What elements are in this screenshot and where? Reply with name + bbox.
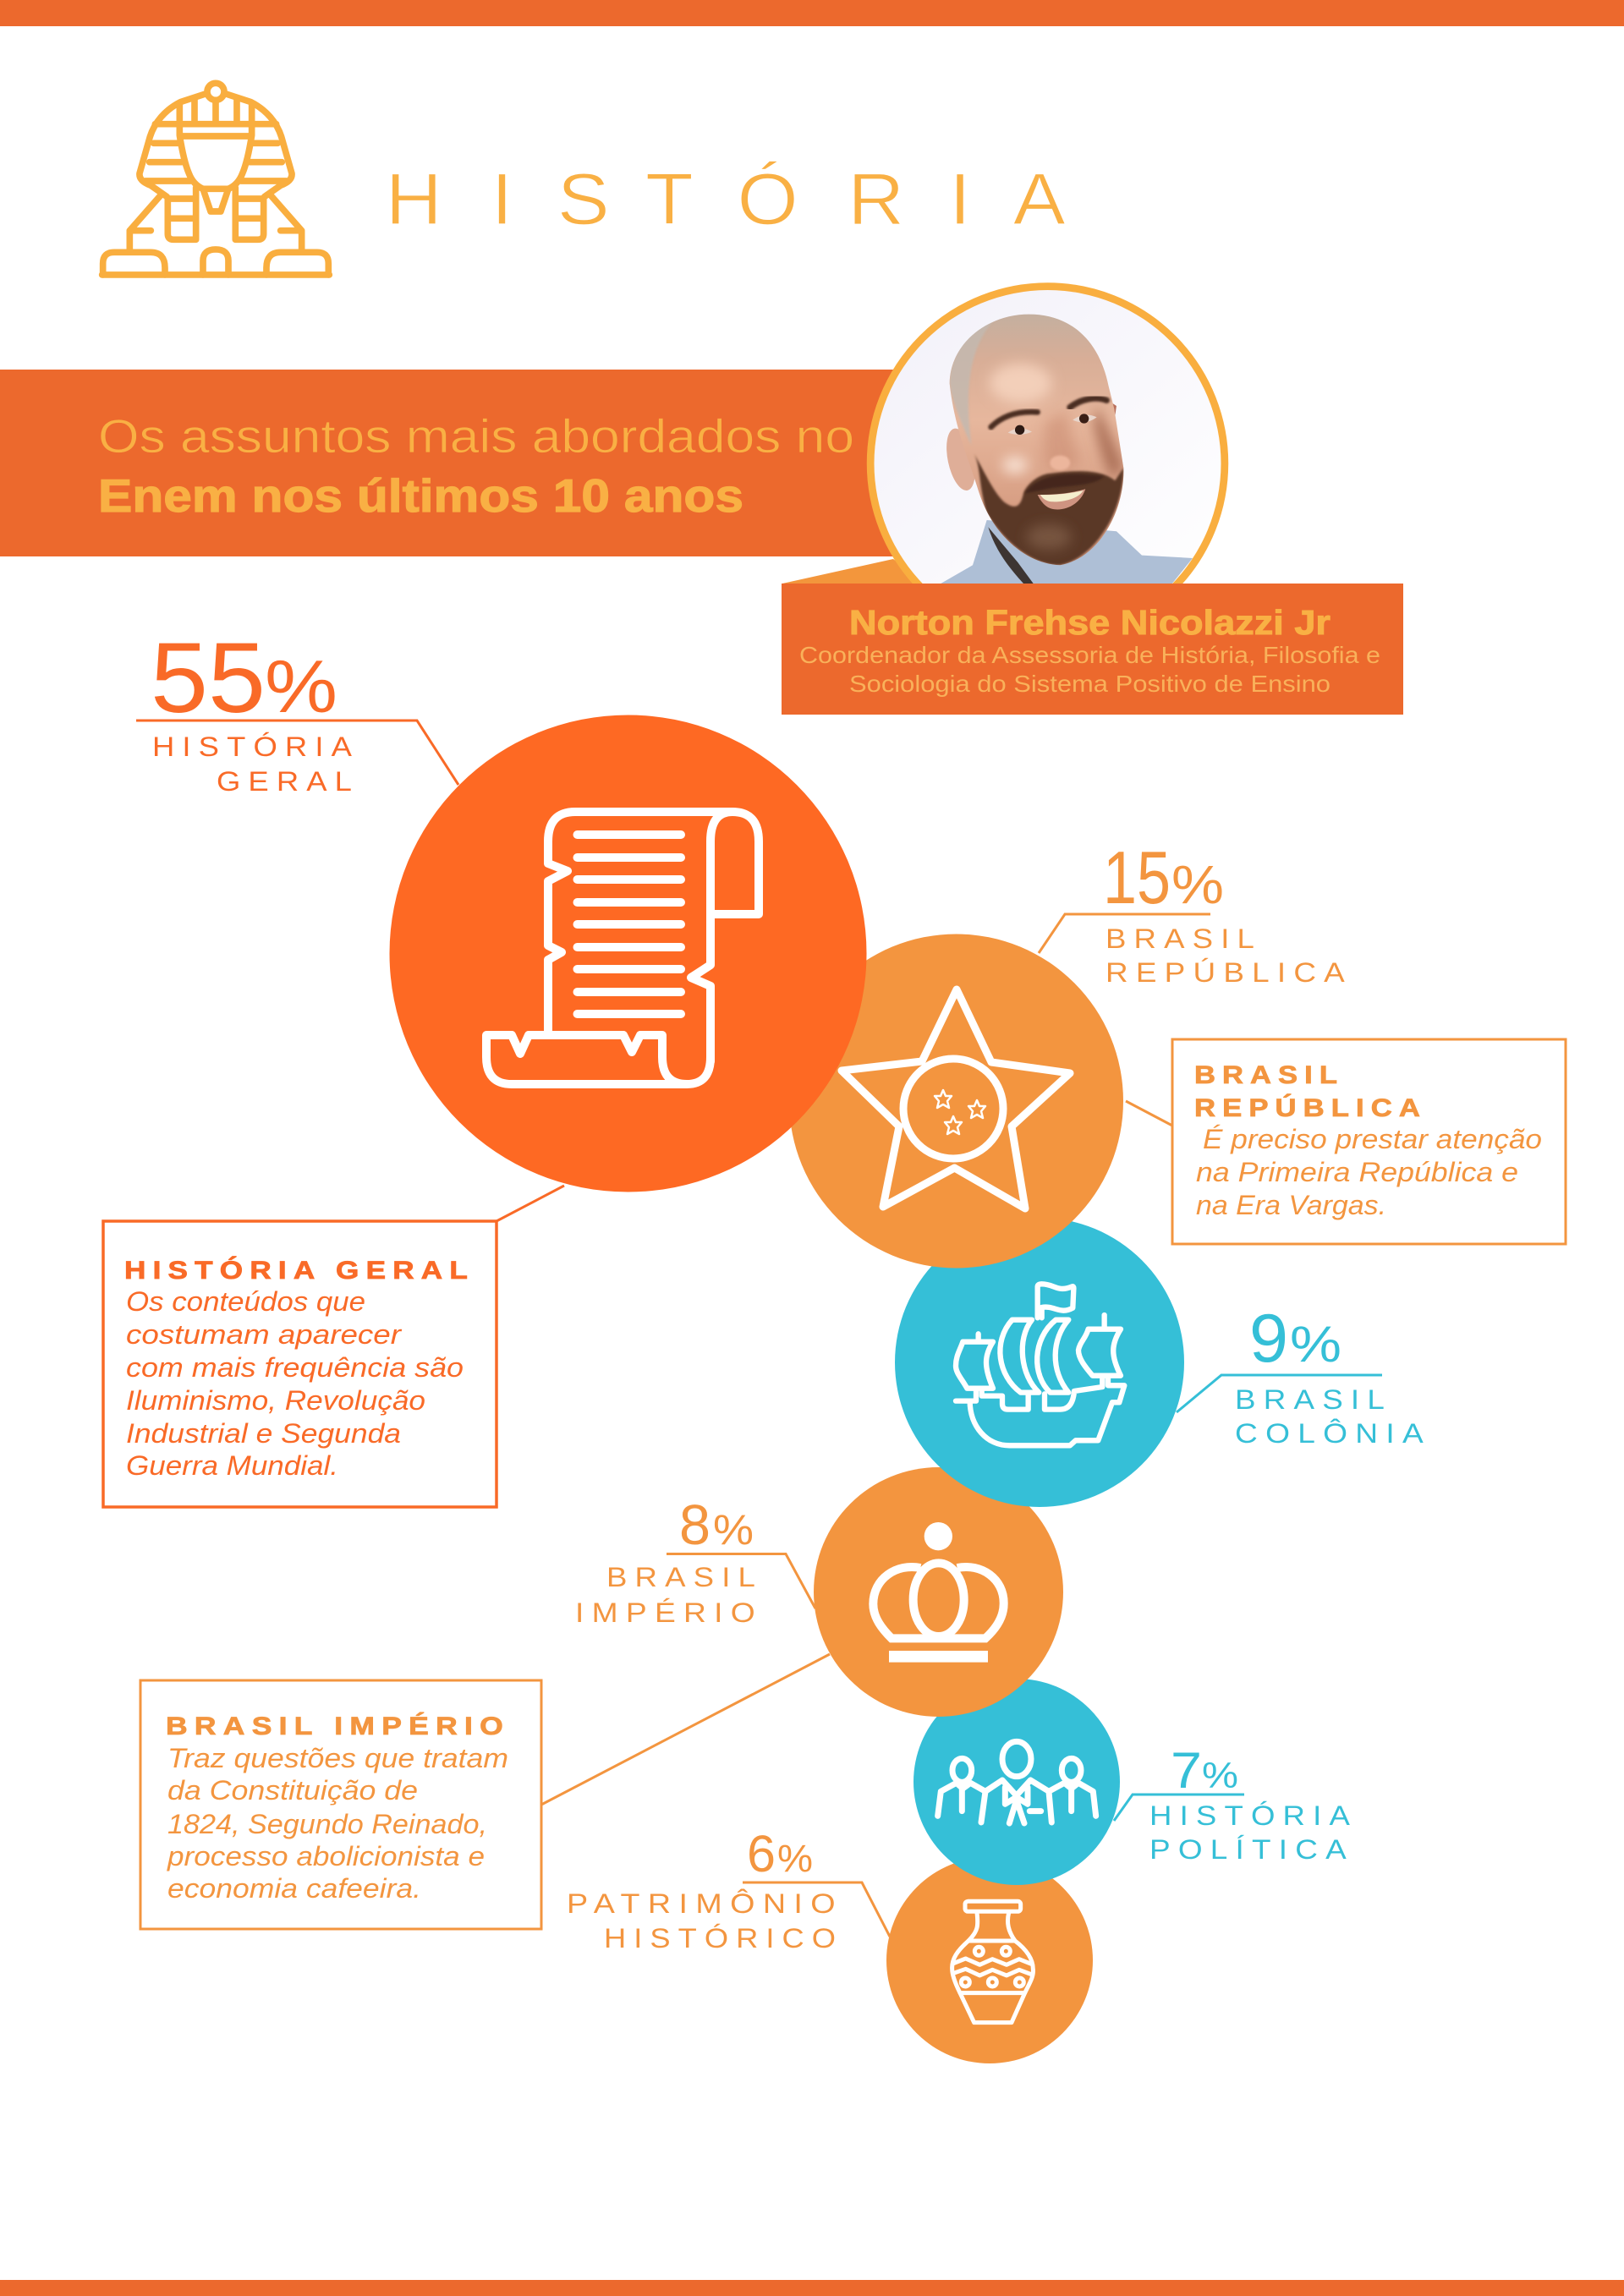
stat: 7% historia politica: % [1202,1756,1238,1796]
stat: 55% historia geral: HISTÓRIA [152,732,359,762]
stat: 9% brasil colonia: % [1290,1316,1341,1373]
bottom bar [0,2280,1624,2296]
icon: scroll [486,812,759,1084]
stat: 6% patrimonio historico: PATRIMÔNIO [567,1888,843,1919]
icon: crown [873,1522,1004,1663]
callout: historia geral: HISTÓRIA GERAL [124,1256,475,1285]
banner heading [98,409,854,522]
stat: 7% historia politica: HISTÓRIA [1149,1800,1358,1831]
banner heading: Enem nos últimos 10 anos [98,469,743,522]
portrait [866,282,1228,584]
expert role: Sociologia do Sistema Positivo de Ensino [849,671,1330,697]
callout: brasil imperio: BRASIL IMPÉRIO [166,1712,510,1740]
stat: 55% historia geral: GERAL [217,766,359,797]
circle: brasil imperio with crown [814,1467,1063,1717]
stat: 6% patrimonio historico: % [777,1837,813,1880]
callout: historia geral: Guerra Mundial. [126,1450,338,1481]
stat: 8% brasil imperio: 8 [679,1493,710,1557]
stat: 8% brasil imperio: IMPÉRIO [575,1597,763,1628]
stat: 15% brasil republica [1103,836,1352,988]
callout: historia geral [103,1221,497,1507]
stat: 8% brasil imperio: BRASIL [606,1562,763,1592]
name box [782,584,1403,715]
callout: brasil imperio: Traz questões que tratam [167,1743,508,1773]
stat: 6% patrimonio historico [567,1825,843,1954]
stat: 8% brasil imperio: % [713,1506,754,1553]
circle: historia politica with people [914,1679,1120,1885]
callout: historia geral: costumam aparecer [126,1319,403,1350]
stat: 7% historia politica: POLÍTICA [1149,1834,1354,1865]
icon: caravel ship [956,1284,1124,1445]
banner [0,370,905,556]
stat: 7% historia politica: 7 [1171,1742,1202,1799]
callout: brasil republica: BRASIL [1194,1061,1344,1089]
stat: 15% brasil republica: 15 [1103,836,1171,919]
name tag ribbon [782,559,926,584]
callout: brasil imperio: 1824, Segundo Reinado, [167,1809,487,1839]
stat: 9% brasil colonia [1235,1301,1431,1449]
banner heading: Os assuntos mais abordados no [98,409,854,463]
top bar [0,0,1624,26]
callout: brasil imperio [140,1680,541,1929]
stat: 9% brasil colonia: 9 [1249,1301,1288,1377]
callout: brasil republica: REPÚBLICA [1194,1093,1427,1122]
stat: 6% patrimonio historico: 6 [747,1825,776,1882]
callout: historia geral: Industrial e Segunda [126,1418,401,1449]
circle: brasil republica [789,934,1123,1269]
leader lines [136,721,1382,1937]
callout: historia geral: com mais frequência são [126,1352,464,1383]
callout: brasil imperio: economia cafeeira. [167,1873,421,1904]
callout: brasil imperio: da Constituição de [167,1775,418,1806]
icon: vase [952,1901,1033,2023]
expert role [799,642,1380,697]
stat: 55% historia geral: % [265,644,337,728]
stat: 15% brasil republica: REPÚBLICA [1106,957,1352,988]
callout: brasil republica [1172,1039,1566,1244]
stat: 15% brasil republica: % [1171,854,1224,915]
callout: brasil imperio: processo abolicionista e [167,1841,485,1871]
stat: 9% brasil colonia: COLÔNIA [1235,1418,1431,1449]
icon: star with circle [842,989,1070,1208]
callout: brasil republica: na Primeira República e [1196,1157,1518,1187]
callout: historia geral: Iluminismo, Revolução [126,1385,425,1416]
stat: 15% brasil republica: BRASIL [1106,923,1262,954]
stat: 7% historia politica [1149,1742,1358,1865]
circle: brasil colonia with ship [895,1218,1184,1507]
stat: 8% brasil imperio [575,1493,763,1628]
expert name: Norton Frehse Nicolazzi Jr [849,603,1330,642]
icon: three politicians [938,1741,1096,1823]
callout: brasil republica: na Era Vargas. [1196,1190,1386,1220]
expert role: Coordenador da Assessoria de História, Filosofia e [799,642,1380,668]
stat: 9% brasil colonia: BRASIL [1235,1384,1392,1415]
circle: historia geral with scroll [389,715,866,1192]
callout: historia geral: Os conteúdos que [126,1286,365,1317]
callout: brasil republica: É preciso prestar atenção [1203,1124,1542,1154]
circle: patrimonio historico with vase [886,1857,1093,2063]
stat: 55% historia geral: 55 [151,622,266,734]
icon: sphinx [102,83,329,275]
stat: 6% patrimonio historico: HISTÓRICO [604,1923,843,1954]
stat: 55% historia geral [151,622,359,797]
title: HISTÓRIA [386,158,1066,239]
